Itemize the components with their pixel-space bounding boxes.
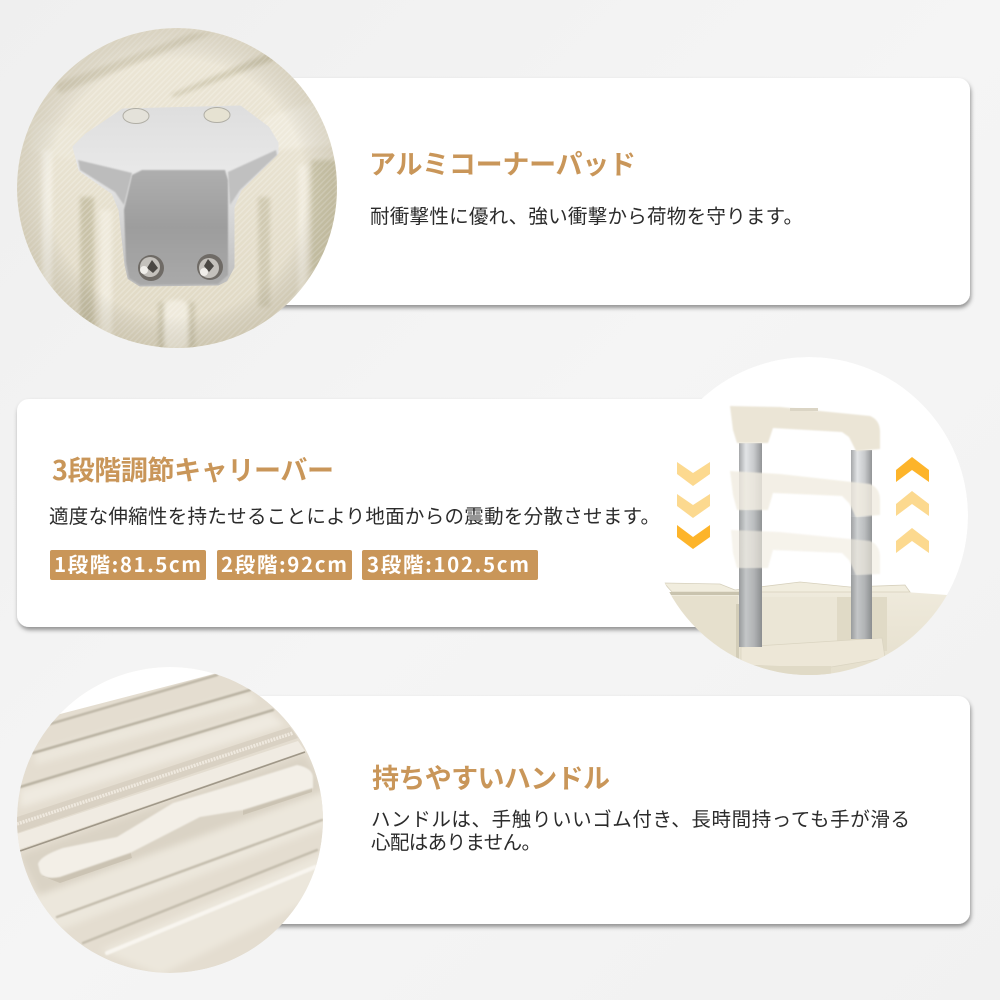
handle (38, 765, 313, 883)
ghost handle: lowest position (731, 530, 880, 575)
photo: telescopic carry bar (664, 357, 968, 675)
heading: three-stage carry bar: 3段階調節キャリーバー (52, 449, 334, 488)
photo: side carry handle (10, 660, 330, 975)
icon: down chevrons (677, 462, 710, 549)
suitcase body (664, 582, 947, 675)
zipper (17, 727, 298, 833)
text: handle description (371, 803, 910, 855)
badge: stage 3: 3段階:102.5cm (367, 548, 529, 578)
panel: corner pad card (250, 78, 970, 305)
icon: metal corner plate (74, 107, 277, 285)
text: corner pad description: 耐衝撃性に優れ、強い衝撃から荷物を守ります。 (370, 200, 803, 229)
text: handle description: 心配はありません。 (371, 826, 541, 855)
icon: up chevrons (896, 457, 929, 553)
panel: carry bar card (17, 399, 737, 627)
badge: stage 1: 1段階:81.5cm (54, 548, 201, 578)
badge: stage 2: 2段階:92cm (221, 548, 347, 578)
ghost handle: middle position (730, 471, 880, 517)
poles (739, 443, 872, 647)
heading: aluminium corner pad: アルミコーナーパッド (369, 143, 636, 182)
text: handle description: ハンドルは、手触りいいゴム付き、長時間持っても手が滑る (371, 803, 910, 832)
heading: easy-grip handle: 持ちやすいハンドル (372, 757, 610, 796)
photo: aluminium corner pad (17, 28, 338, 352)
panel: handle card (250, 696, 970, 924)
carry handle (730, 406, 880, 451)
text: carry bar description: 適度な伸縮性を持たせることにより地面からの震動を分散させます。 (49, 500, 660, 529)
